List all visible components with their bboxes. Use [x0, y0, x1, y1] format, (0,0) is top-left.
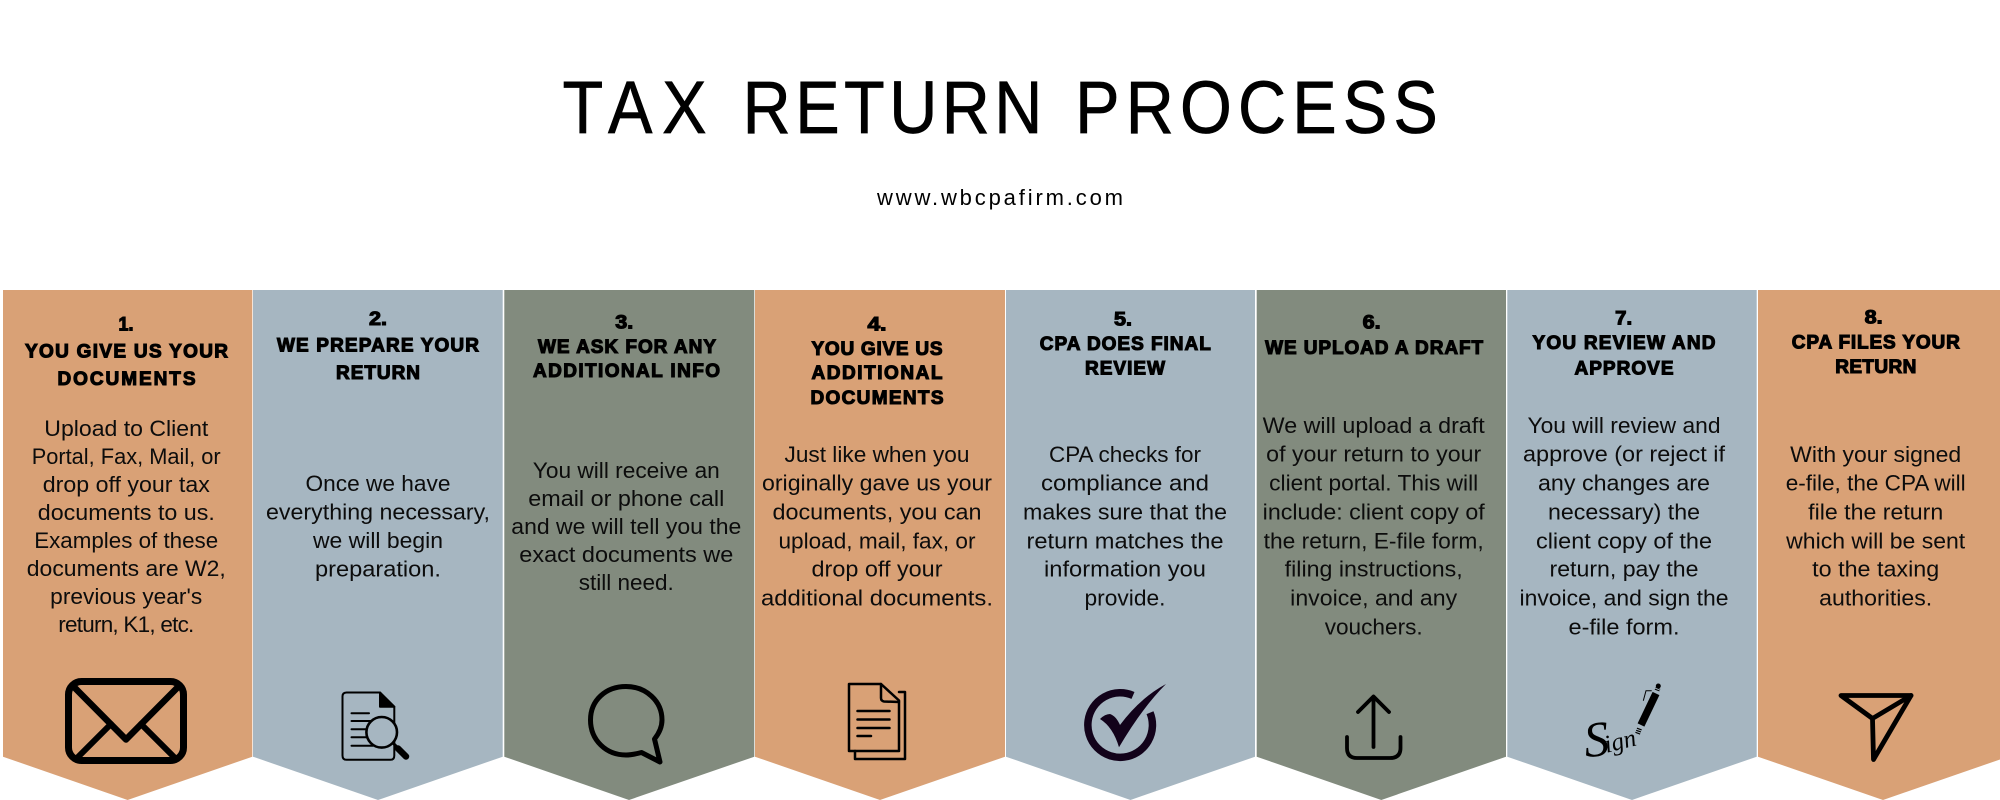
text: step 5 description: [1023, 442, 1227, 611]
icon: check mark in circle: [1088, 684, 1166, 757]
heading: step 7: 7.: [1615, 308, 1632, 329]
panel: step 2: [253, 290, 503, 800]
text: step 4 description: [761, 442, 993, 611]
title: RETURN: [743, 66, 1042, 149]
text: step 6 description: of your return to your: [1266, 442, 1482, 467]
heading: step 1: YOU GIVE US YOUR: [25, 342, 228, 362]
panel: step 1: [3, 290, 252, 800]
heading: step 8: RETURN: [1835, 357, 1916, 378]
heading: step 5: 5.: [1114, 309, 1132, 330]
text: step 2 description: everything necessary,: [266, 500, 490, 525]
text: step 4 description: upload, mail, fax, or: [778, 528, 976, 553]
heading: step 7: APPROVE: [1574, 358, 1674, 379]
icon: pen signing: ign: [1601, 725, 1639, 759]
heading: step 3: [533, 313, 720, 382]
text: step 1 description: [27, 416, 226, 637]
text: step 2 description: preparation.: [315, 557, 441, 582]
heading: step 5: REVIEW: [1085, 358, 1165, 379]
text: step 5 description: CPA checks for: [1049, 442, 1202, 467]
heading: step 4: [810, 315, 944, 409]
heading: step 1: [25, 314, 228, 390]
text: step 7 description: You will review and: [1528, 413, 1720, 438]
text: step 8 description: e-file, the CPA will: [1786, 471, 1966, 496]
heading: step 1: DOCUMENTS: [58, 369, 196, 390]
text: step 6 description: client portal. This will: [1269, 471, 1478, 496]
heading: step 6: WE UPLOAD A DRAFT: [1265, 338, 1483, 359]
heading: step 3: WE ASK FOR ANY: [538, 337, 716, 358]
heading: step 4: ADDITIONAL: [812, 363, 943, 384]
icon: pen signing: [1581, 684, 1661, 768]
text: step 8 description: authorities.: [1819, 586, 1932, 611]
text: step 5 description: return matches the: [1026, 528, 1224, 553]
panel: step 8: [1758, 290, 2000, 800]
text: step 1 description: previous year's: [50, 584, 202, 609]
text: step 8 description: to the taxing: [1812, 557, 1939, 582]
text: step 3 description: email or phone call: [528, 486, 724, 511]
icon: envelope: [68, 682, 184, 760]
icon: speech bubble: [590, 686, 662, 762]
heading: step 4: DOCUMENTS: [810, 388, 944, 409]
text: step 3 description: exact documents we: [519, 542, 733, 567]
icon: documents: [849, 684, 905, 759]
text: step 7 description: [1520, 413, 1728, 640]
text: step 6 description: filing instructions,: [1285, 557, 1463, 582]
text: step 7 description: e-file form.: [1568, 615, 1680, 640]
text: step 6 description: [1263, 413, 1485, 640]
icon: upload arrow: [1347, 696, 1400, 758]
title: [562, 66, 1438, 149]
website url: www.wbcpafirm.com: [876, 185, 1123, 210]
text: step 1 description: documents to us.: [38, 500, 215, 525]
text: step 3 description: You will receive an: [533, 458, 720, 483]
text: step 1 description: drop off your tax: [43, 472, 211, 497]
heading: step 4: 4.: [868, 315, 886, 336]
heading: step 5: [1040, 309, 1211, 379]
text: step 4 description: drop off your: [812, 557, 943, 582]
text: step 6 description: the return, E-file form,: [1264, 528, 1484, 553]
heading: step 2: WE PREPARE YOUR: [277, 336, 479, 357]
text: step 2 description: [266, 471, 490, 582]
text: step 3 description: [511, 458, 741, 595]
text: step 8 description: file the return: [1808, 500, 1943, 525]
heading: step 3: 3.: [615, 313, 633, 334]
text: step 4 description: additional documents.: [761, 586, 993, 611]
text: step 7 description: invoice, and sign the: [1520, 586, 1728, 611]
heading: step 5: CPA DOES FINAL: [1040, 334, 1211, 355]
heading: step 6: 6.: [1363, 313, 1381, 334]
panel: step 7: [1507, 290, 1757, 800]
panel: step 5: [1006, 290, 1255, 800]
text: step 6 description: We will upload a draft: [1263, 413, 1485, 438]
heading: step 2: [277, 309, 479, 384]
panel: step 4: [755, 290, 1005, 800]
text: step 4 description: Just like when you: [784, 442, 970, 467]
text: step 5 description: provide.: [1084, 586, 1166, 611]
icon: document with magnifier: [342, 692, 406, 760]
text: step 6 description: invoice, and any: [1290, 586, 1458, 611]
text: step 6 description: include: client copy of: [1263, 500, 1485, 525]
text: step 4 description: originally gave us your: [762, 471, 993, 496]
heading: step 8: [1792, 307, 1960, 378]
heading: step 2: 2.: [369, 309, 387, 330]
text: step 7 description: client copy of the: [1536, 528, 1712, 553]
text: step 3 description: still need.: [579, 570, 674, 595]
heading: step 8: 8.: [1865, 307, 1883, 328]
text: step 3 description: and we will tell you the: [511, 514, 741, 539]
icon: pen signing: S: [1581, 710, 1612, 768]
panel: step 3: [504, 290, 754, 800]
text: step 2 description: we will begin: [312, 528, 443, 553]
heading: step 3: ADDITIONAL INFO: [533, 361, 720, 382]
text: step 7 description: approve (or reject if: [1523, 442, 1726, 467]
text: step 8 description: [1785, 442, 1966, 611]
text: step 2 description: Once we have: [306, 471, 450, 496]
heading: step 8: CPA FILES YOUR: [1792, 332, 1960, 353]
icon: paper plane: [1841, 696, 1911, 760]
text: step 8 description: which will be sent: [1785, 528, 1966, 553]
text: step 7 description: return, pay the: [1550, 557, 1698, 582]
text: step 1 description: return, K1, etc.: [58, 612, 194, 637]
heading: step 2: RETURN: [336, 363, 420, 384]
text: step 5 description: compliance and: [1041, 471, 1209, 496]
text: step 1 description: Examples of these: [34, 528, 218, 553]
text: step 7 description: necessary) the: [1548, 500, 1700, 525]
text: step 7 description: any changes are: [1538, 471, 1710, 496]
text: step 8 description: With your signed: [1790, 442, 1961, 467]
heading: step 4: YOU GIVE US: [812, 339, 942, 360]
text: step 5 description: makes sure that the: [1023, 500, 1227, 525]
text: step 1 description: documents are W2,: [27, 556, 226, 581]
heading: step 7: [1532, 308, 1716, 379]
text: step 5 description: information you: [1044, 557, 1206, 582]
heading: step 7: YOU REVIEW AND: [1532, 333, 1716, 354]
text: step 1 description: Portal, Fax, Mail, or: [32, 444, 221, 469]
title: TAX: [562, 66, 707, 149]
text: step 1 description: Upload to Client: [44, 416, 209, 441]
heading: step 6: [1265, 313, 1483, 359]
text: step 4 description: documents, you can: [772, 500, 982, 525]
heading: step 1: 1.: [118, 314, 134, 336]
title: PROCESS: [1075, 66, 1438, 149]
text: step 6 description: vouchers.: [1325, 615, 1423, 640]
panel: step 6: [1257, 290, 1506, 800]
